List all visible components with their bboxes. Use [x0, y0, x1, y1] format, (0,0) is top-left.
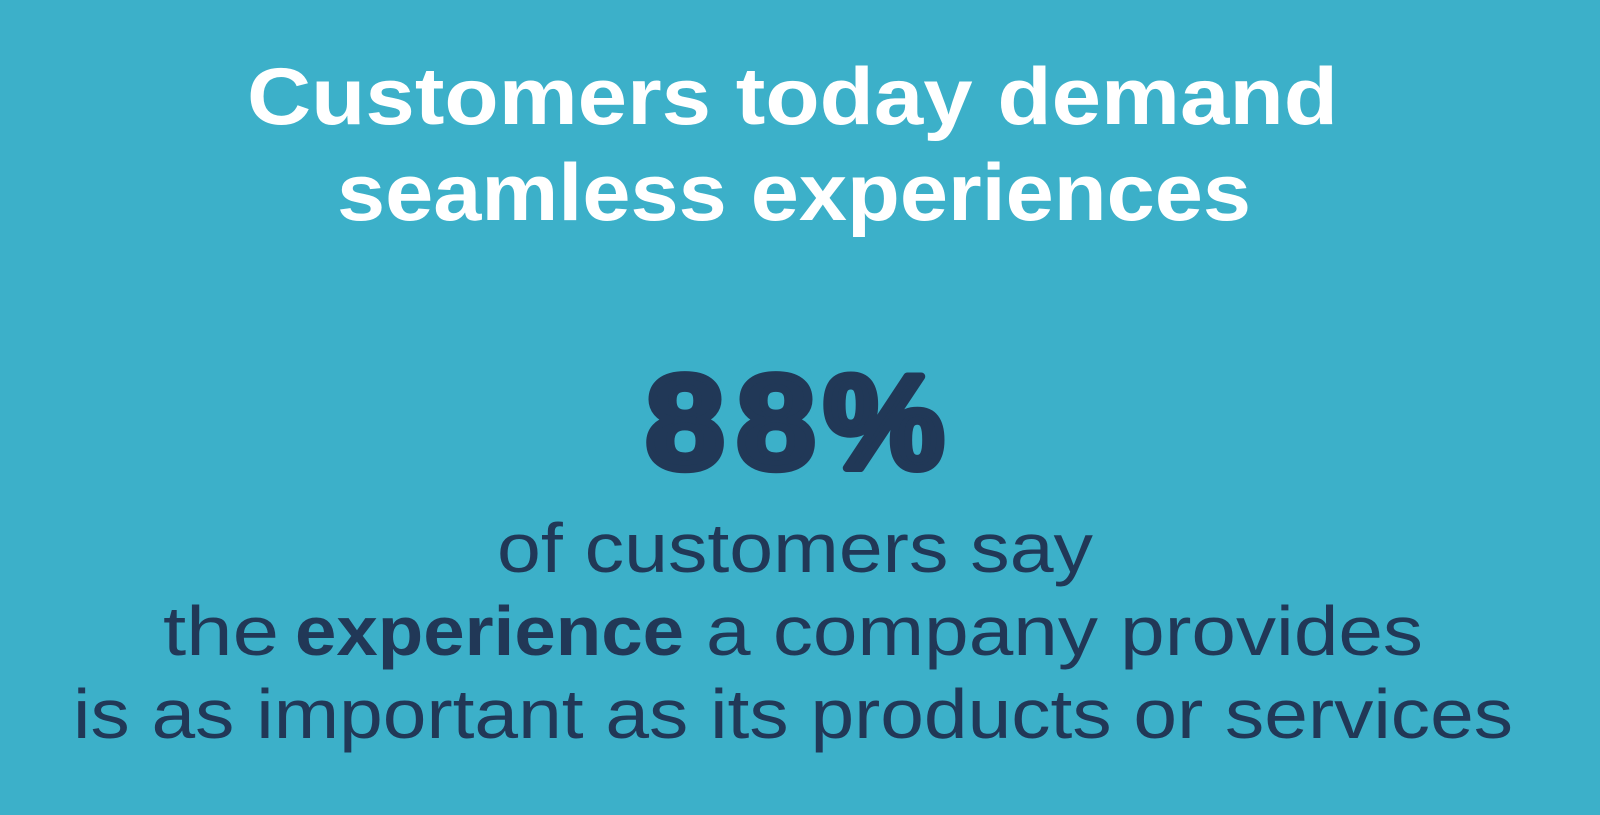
statistic description: a company provides — [706, 592, 1423, 670]
statistic description: the — [163, 592, 279, 670]
big statistic: 88% — [646, 349, 944, 497]
title: Customers today demand — [247, 52, 1338, 142]
big statistic: 88%: % — [824, 349, 944, 497]
statistic description — [73, 509, 1513, 753]
statistic description: is as important as its products or services — [73, 675, 1513, 753]
big statistic: 88%: 8 — [737, 349, 815, 497]
statistic description: of customers say — [497, 509, 1093, 587]
title: seamless experiences — [337, 148, 1251, 238]
big statistic: 88%: 8 — [646, 349, 724, 497]
title — [247, 52, 1338, 238]
statistic description: experience — [295, 592, 684, 670]
